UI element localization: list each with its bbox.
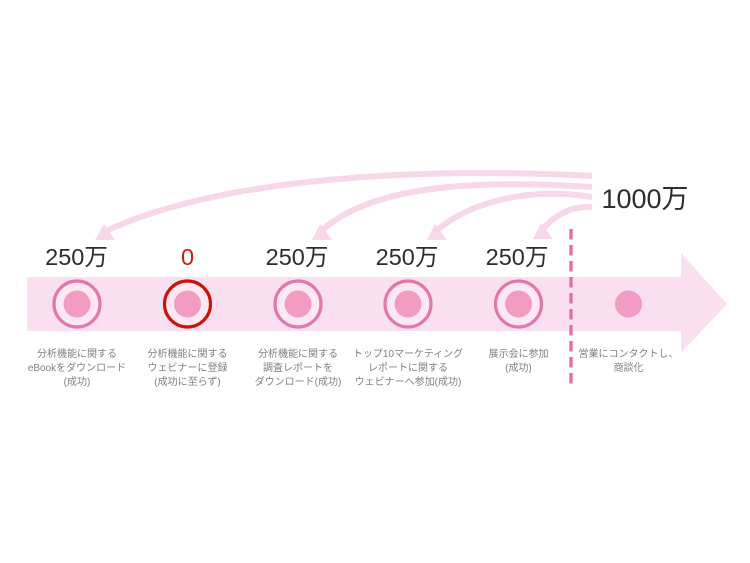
caption: 分析機能に関する bbox=[258, 347, 338, 360]
value: 250万 bbox=[266, 244, 328, 270]
step 1 bbox=[28, 244, 126, 388]
timeline arrow bbox=[27, 253, 727, 353]
marker bbox=[164, 281, 210, 327]
caption: 営業にコンタクトし、 bbox=[578, 347, 678, 360]
value: 0 bbox=[181, 244, 194, 270]
caption: 商談化 bbox=[614, 361, 644, 374]
marker bbox=[54, 281, 100, 327]
caption: (成功に至らず) bbox=[154, 376, 221, 388]
value: 250万 bbox=[486, 244, 548, 270]
caption: トップ10マーケティング bbox=[353, 347, 463, 360]
caption: ウェビナーへ参加(成功) bbox=[355, 376, 461, 388]
value: 250万 bbox=[45, 244, 108, 270]
caption: 分析機能に関する bbox=[37, 347, 117, 360]
step 5 bbox=[486, 244, 548, 374]
caption: ウェビナーに登録 bbox=[148, 361, 228, 374]
caption: (成功) bbox=[64, 376, 90, 388]
arrow: to step 3 bbox=[312, 184, 592, 240]
total value: 1000万 bbox=[601, 184, 689, 214]
marker bbox=[615, 290, 642, 318]
caption: レポートに関する bbox=[368, 362, 448, 374]
caption: eBookをダウンロード bbox=[28, 361, 126, 374]
caption: ダウンロード(成功) bbox=[255, 375, 341, 388]
step 3 bbox=[255, 244, 341, 388]
step 6 bbox=[578, 290, 678, 374]
caption: 展示会に参加 bbox=[488, 347, 548, 360]
arrow: to step 1 bbox=[95, 173, 592, 240]
step 4 bbox=[353, 244, 463, 388]
caption: (成功) bbox=[505, 362, 532, 374]
arrow: to step 4 bbox=[427, 194, 592, 240]
caption: 分析機能に関する bbox=[148, 347, 228, 360]
dashed divider bbox=[569, 229, 573, 386]
arrow: to step 5 bbox=[533, 207, 592, 239]
curved arrows bbox=[95, 173, 592, 240]
marker bbox=[275, 281, 321, 327]
step 2 bbox=[148, 244, 228, 388]
marker bbox=[496, 281, 542, 327]
caption: 調査レポートを bbox=[263, 361, 333, 374]
marker bbox=[385, 281, 431, 327]
value: 250万 bbox=[376, 244, 438, 270]
